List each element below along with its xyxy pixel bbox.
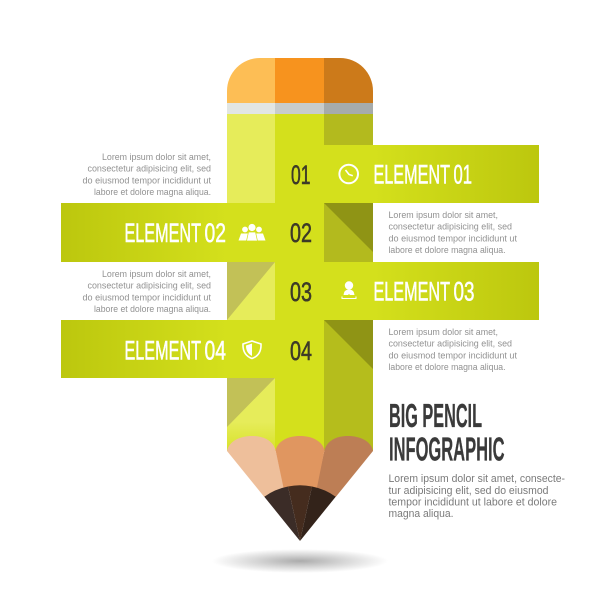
label element 03: ELEMENT — [374, 276, 450, 306]
number 01: 01 — [291, 160, 310, 190]
ferrule band — [227, 103, 373, 114]
ground shadow — [212, 549, 388, 573]
description paragraph: tur adipisicing elit, sed do eiusmod — [388, 485, 549, 497]
title: BIG PENCIL — [389, 398, 482, 435]
number 03: 03 — [290, 277, 312, 307]
text block: middle left: Lorem ipsum dolor sit amet, — [102, 269, 211, 280]
band: element 04 — [61, 320, 324, 378]
label element 03: 03 — [454, 276, 474, 306]
text block: lower right: consectetur adipisicing elit, sed — [388, 339, 512, 350]
text block: middle left: do eiusmod tempor incididunt ut — [82, 292, 211, 303]
text block: top left: labore et dolore magna aliqua. — [94, 187, 211, 198]
number 04: 04 — [290, 336, 312, 366]
pencil — [227, 58, 373, 541]
icon: user — [342, 281, 356, 299]
text block: lower right — [388, 327, 517, 373]
label element 01: 01 — [454, 160, 472, 190]
description paragraph: Lorem ipsum dolor sit amet, consecte- — [388, 473, 565, 485]
icon: shield — [243, 341, 261, 358]
band: element 02 — [61, 203, 324, 262]
text block: middle left: labore et dolore magna aliqua. — [94, 304, 211, 315]
label element 04: ELEMENT — [124, 336, 201, 366]
description paragraph: magna aliqua. — [388, 508, 454, 520]
description paragraph: tempor incididunt ut labore et dolore — [388, 496, 557, 508]
graphite point — [264, 485, 336, 541]
text block: middle left: consectetur adipisicing elit, sed — [88, 281, 211, 292]
pencil body — [227, 114, 373, 451]
text block: lower right: Lorem ipsum dolor sit amet, — [388, 327, 498, 338]
text block: upper right: consectetur adipisicing elit, sed — [388, 222, 512, 233]
title — [389, 398, 504, 468]
text block: middle left — [82, 269, 211, 315]
text block: top left: consectetur adipisicing elit, sed — [88, 164, 211, 175]
text block: upper right: do eiusmod tempor incididunt ut — [388, 233, 517, 244]
text block: lower right: labore et dolore magna aliqua. — [388, 362, 506, 373]
icon: clock — [339, 165, 358, 183]
text block: top left: do eiusmod tempor incididunt ut — [82, 175, 211, 186]
label element 01: ELEMENT — [374, 160, 450, 190]
band: element 03 — [275, 262, 539, 320]
description paragraph — [388, 473, 565, 520]
band: element 01 — [291, 145, 539, 203]
text block: upper right: labore et dolore magna aliqua. — [388, 245, 506, 256]
icon: people — [238, 224, 266, 241]
eraser — [227, 58, 373, 103]
label element 02: ELEMENT — [124, 218, 201, 248]
text block: top left: Lorem ipsum dolor sit amet, — [102, 152, 211, 163]
wood tip — [227, 436, 373, 497]
label element 02: 02 — [204, 218, 226, 248]
text block: top left — [82, 152, 211, 198]
label element 04: 04 — [204, 336, 226, 366]
text block: lower right: do eiusmod tempor incididunt ut — [388, 350, 517, 361]
text block: upper right: Lorem ipsum dolor sit amet, — [388, 210, 498, 221]
text block: upper right — [388, 210, 517, 256]
number 02: 02 — [290, 218, 312, 248]
